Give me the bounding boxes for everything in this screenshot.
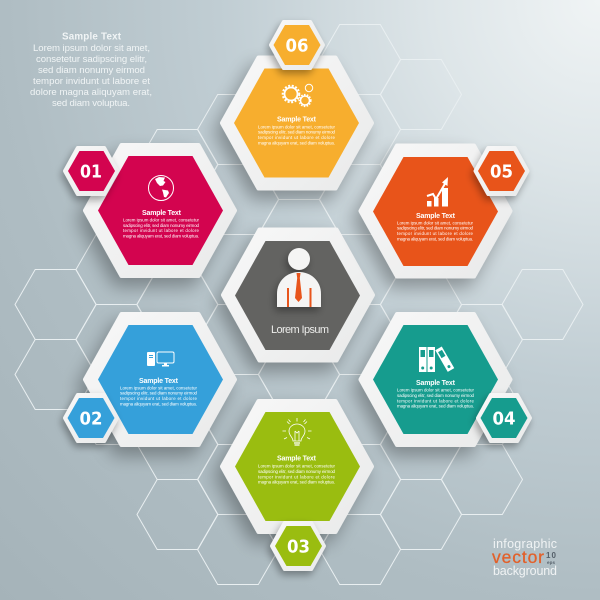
badge: 06 (270, 22, 324, 68)
logo text: eps (547, 560, 555, 565)
text: 02: Sample Text (139, 378, 179, 385)
icon: growth chart (427, 177, 448, 206)
intro text block: Sample Text (62, 32, 122, 42)
text: 06: magna aliquyam erat, sed diam voluptua. (258, 140, 335, 145)
text: 05: tempor invidunt ut labore et dolore (397, 231, 474, 236)
text: 06: sadipscing elitr, sed diam nonumy eirmod (258, 130, 336, 135)
text: 03: tempor invidunt ut labore et dolore (258, 474, 336, 479)
text: 02 (120, 378, 198, 406)
panel: 04 (360, 314, 510, 445)
text: 06: tempor invidunt ut labore et dolore (258, 135, 336, 140)
badge: 05: 05 (490, 162, 513, 182)
panel: 03 (222, 401, 372, 532)
panel: 05 (360, 146, 510, 276)
intro text block: consetetur sadipscing elitr, (36, 54, 147, 65)
text: 01: Sample Text (142, 210, 182, 217)
text: 04: Lorem ipsum dolor sit amet, consetetur (397, 388, 475, 393)
text: 04 (397, 380, 475, 409)
text: 03 (258, 456, 336, 485)
badge: 01: 01 (80, 162, 102, 182)
text: 01: tempor invidunt ut labore et dolore (123, 228, 200, 233)
panel: center person (223, 230, 373, 360)
icon: gears (283, 84, 313, 106)
text: 03: Sample Text (277, 456, 317, 463)
text: 04: Sample Text (416, 380, 456, 387)
badge: 03 (272, 522, 324, 570)
text: 02: Lorem ipsum dolor sit amet, consetetur (120, 385, 198, 390)
logo text (492, 537, 557, 578)
logo text: infographic (493, 537, 557, 551)
intro text block: Lorem ipsum dolor sit amet, (33, 43, 150, 54)
text: 06: Lorem ipsum dolor sit amet, consetetur (258, 124, 336, 129)
badge: 04: 04 (492, 410, 516, 430)
intro text block: dolore magna aliquyam erat, (30, 87, 152, 98)
icon: globe (148, 176, 174, 200)
text: 01 (123, 210, 200, 239)
text: 02: sadipscing elitr, sed diam nonumy eirmod (120, 391, 198, 396)
badge: 06: 06 (286, 36, 308, 56)
badge: 04 (478, 394, 530, 442)
text: 05: sadipscing elitr, sed diam nonumy eirmod (397, 226, 474, 231)
logo text: vector (492, 547, 544, 567)
text: 04: sadipscing elitr, sed diam nonumy eirmod (397, 393, 475, 398)
text: 01: Lorem ipsum dolor sit amet, consetetur (123, 218, 200, 223)
text: 03: sadipscing elitr, sed diam nonumy eirmod (258, 469, 336, 474)
text: 04: magna aliquyam erat, sed diam voluptua. (397, 404, 474, 409)
badge: 02 (64, 394, 118, 442)
text: 01: magna aliquyam erat, sed diam voluptua. (123, 234, 199, 239)
text: 03: magna aliquyam erat, sed diam voluptua. (258, 480, 335, 485)
text: 05: Sample Text (416, 213, 456, 220)
text: 01: sadipscing elitr, sed diam nonumy eirmod (123, 223, 200, 228)
intro text block (30, 32, 152, 109)
badge: 02: 02 (80, 410, 102, 430)
icon: light bulb (282, 418, 312, 445)
text: 05: Lorem ipsum dolor sit amet, consetetur (397, 220, 474, 225)
text: 03: Lorem ipsum dolor sit amet, consetetur (258, 464, 336, 469)
badge: 05 (475, 148, 528, 194)
badge: 03: 03 (287, 538, 310, 558)
logo text: background (493, 564, 557, 578)
icon: person (277, 248, 321, 307)
text: 05 (397, 213, 474, 241)
text: 05: magna aliquyam erat, sed diam voluptua. (397, 236, 473, 241)
panel: 02 (85, 314, 235, 445)
text: 06: Sample Text (277, 117, 317, 124)
panel: 06 (222, 58, 372, 188)
text: 06 (258, 117, 336, 145)
intro text block: sed diam voluptua. (52, 98, 130, 109)
icon: computer (147, 352, 174, 366)
text: 02: tempor invidunt ut labore et dolore (120, 396, 198, 401)
intro text block: sed diam nonumy eirmod (38, 65, 145, 76)
icon: binders (419, 347, 454, 372)
text: 04: tempor invidunt ut labore et dolore (397, 398, 475, 403)
center label: Lorem Ipsum (271, 324, 329, 336)
badge: 01 (64, 148, 118, 194)
logo text: 10 (546, 551, 557, 560)
text: 02: magna aliquyam erat, sed diam voluptua. (120, 401, 197, 406)
panel: 01 (85, 145, 235, 276)
intro text block: tempor invidunt ut labore et (33, 76, 150, 87)
